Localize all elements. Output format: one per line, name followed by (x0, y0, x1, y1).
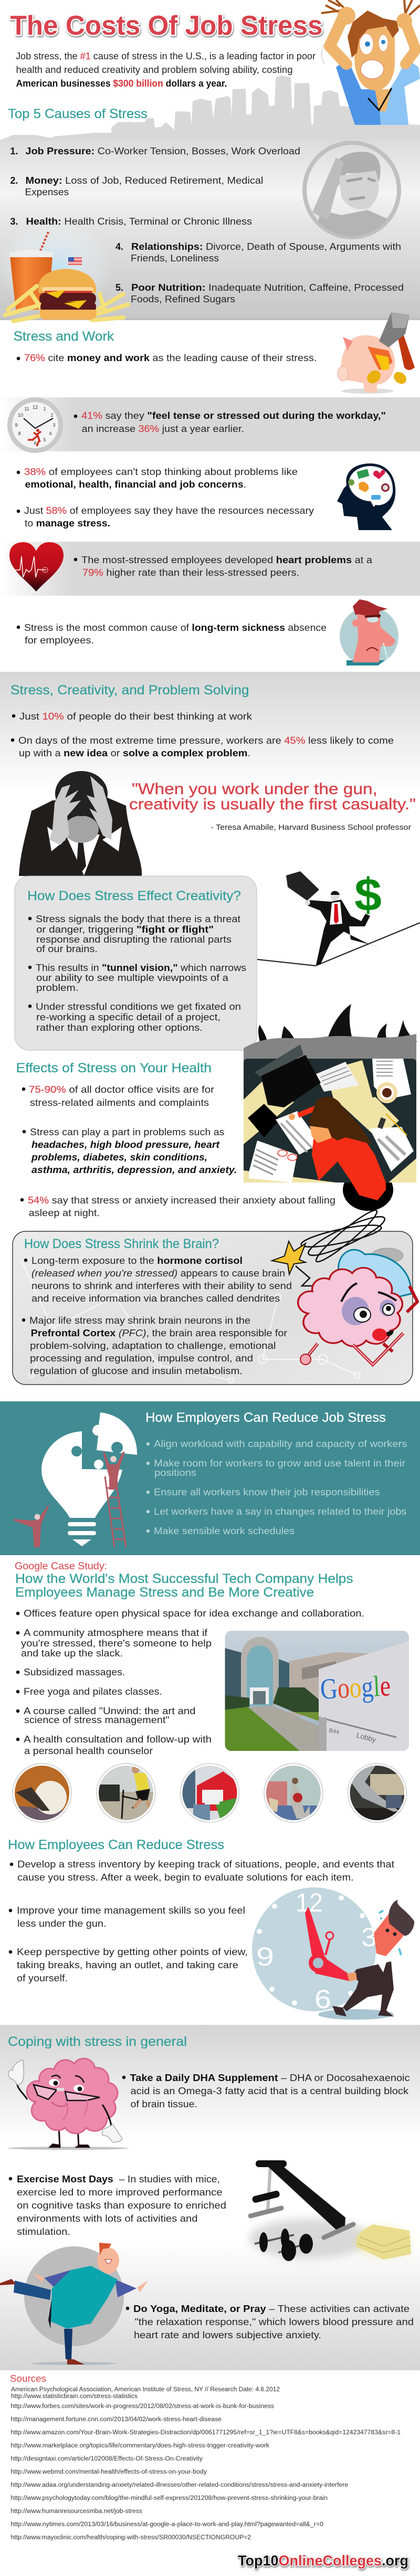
photo ovals row (13, 1764, 406, 1822)
bullet: DHA supplement: of brain tissue. (130, 2099, 197, 2109)
list: google benefits: and take up the slack. (21, 1648, 123, 1659)
panel: how does stress shrink the brain: neurons to shrink and interferes with their ability to send (32, 1281, 292, 1291)
heading: effect creativity: How Does Stress Effect Creativity? (27, 889, 241, 903)
heading: google case study (15, 1561, 353, 1600)
list: employer actions: Make room for workers to grow and use talent in their (154, 1458, 405, 1469)
heading: shrink the brain: How Does Stress Shrink the Brain? (24, 1237, 219, 1251)
icon: wall clock with running man: 3 (52, 423, 56, 428)
list: causes of stress: Foods, Refined Sugars (131, 294, 235, 304)
icon: businessman on tightrope (257, 869, 420, 966)
icon: fast food burger and drink (0, 220, 128, 321)
icon: big clock with running late man: 3 (361, 1923, 377, 1952)
bullets: effects on health: asleep at night. (29, 1208, 100, 1218)
bullets: 38 and 58 percent: emotional, health, financial and job concerns . (25, 479, 246, 490)
icon: big clock with running late man: 9 (256, 1942, 274, 1971)
panel: how does stress shrink the brain: and receive information via branches called dendrites (32, 1293, 280, 1304)
bullet: 41 percent: 41% say they "feel tense or stressed out during the workday," (81, 410, 386, 421)
panel: how does stress effect creativity: our ability to see multiple viewpoints of a (36, 973, 229, 983)
icon: exercise bench and dumbbells (249, 2160, 412, 2261)
panel: how does stress shrink the brain: Major life stress may shrink brain neurons in the (29, 1315, 250, 1326)
list: causes of stress: Relationships: Divorce, Death of Spouse, Arguments with (131, 241, 401, 252)
quote: creativity is usually the first casualty." (129, 796, 416, 813)
icon: lightbulb puzzle with workers (14, 1412, 137, 1547)
bullets: effects on health (20, 1084, 335, 1218)
intro text block: Job stress, the #1 cause of stress in the U.S., is a leading factor in poor (16, 51, 316, 61)
bullets: effects on health: asthma, arthritis, depression, and anxiety. (32, 1165, 237, 1175)
icon: head silhouette with worries (337, 463, 395, 530)
icon: wall clock with running man: 11 (24, 406, 29, 411)
quote attribution: - Teresa Amabile, Harvard Business School professor (211, 823, 411, 832)
photo: hanging chairs (264, 1764, 323, 1822)
sources list (10, 2387, 401, 2541)
bullet: exercise: exercise led to more improved performance (17, 2187, 223, 2198)
sources list: http://www.nytimes.com/2013/03/16/business/at-google-a-place-to-work-and-play.html?pagewanted=all&_r=0 (10, 2521, 323, 2528)
intro text block (16, 51, 316, 89)
bullet: yoga: heart rate and lowers subjective anxiety. (134, 2330, 321, 2340)
icon: wall clock with running man: 4 (49, 431, 52, 436)
panel: how does stress effect creativity: This results in "tunnel vision," which narrows (36, 963, 246, 973)
heading: employers reduce stress: How Employers Can Reduce Job Stress (145, 1410, 386, 1425)
bullet: yoga (126, 2304, 414, 2340)
bullets: effects on health: Stress can play a part in problems such as (30, 1127, 225, 1137)
panel: how does stress effect creativity: rather than exploring other options. (36, 1022, 203, 1033)
panel: how does stress effect creativity: of our brains. (36, 944, 98, 954)
list: causes of stress: 1. (10, 146, 18, 156)
list: google benefits (16, 1608, 364, 1756)
list: employee actions: Develop a stress inventory by keeping track of situations, people, and events that (17, 1859, 394, 1870)
heading: sources: Sources (10, 2373, 46, 2384)
icon: wall clock with running man: 8 (18, 431, 21, 436)
list: google benefits: science of stress management" (24, 1715, 169, 1725)
photo: google headquarters lobby sign (225, 1631, 410, 1751)
photo: google headquarters lobby sign: Lobby (355, 1730, 377, 1744)
icon: piggy bank and hammer (338, 312, 415, 394)
panel: how does stress effect creativity: Under stressful conditions we get fixated on (36, 1001, 241, 1012)
heading: google case study: Google Case Study: (15, 1561, 107, 1572)
panel: how does stress effect creativity: Stress signals the body that there is a threat (36, 914, 240, 924)
list: employee actions: Improve your time management skills so you feel (17, 1905, 245, 1916)
intro text block: health and reduced creativity and problem solving ability, costing (16, 65, 293, 75)
list: employer actions: Align workload with capability and capacity of workers (154, 1439, 407, 1449)
bullet: exercise (9, 2174, 226, 2237)
list: causes of stress: Health: Health Crisis, Terminal or Chronic Illness (26, 216, 252, 227)
photo: slide (348, 1764, 406, 1822)
icon: wall clock with running man: 2 (50, 413, 54, 418)
bullets: 10 and 45 percent: up with a new idea or solve a complex problem . (19, 748, 250, 758)
bullets: 10 and 45 percent: On days of the most extreme time pressure, workers are 45% less likely to come (18, 735, 394, 746)
bullets: 38 and 58 percent: 38% of employees can't stop thinking about problems like (24, 467, 298, 477)
heading: top 5 causes: Top 5 Causes of Stress (8, 107, 148, 121)
icon: sick brain with ice pack (272, 1206, 417, 1365)
bullet: heart problems: 79% higher rate than their less-stressed peers. (82, 567, 299, 578)
footer logo: Top10OnlineColleges.org (238, 2552, 408, 2569)
list: causes of stress (10, 146, 404, 304)
heading: stress and work: Stress and Work (14, 329, 114, 344)
bullet: heart problems: The most-stressed employees developed heart problems at a (81, 555, 373, 565)
panel: heart band (0, 542, 420, 596)
icon: wall clock with running man: 1 (43, 406, 46, 411)
sources list: http://designtaxi.com/article/102008/Effects-Of-Stress-On-Creativity (10, 2456, 203, 2462)
panel: creativity background (0, 672, 420, 793)
sources list: http://www.humanresourcesmba.net/job-stress (10, 2508, 142, 2515)
list: employee actions: less under the gun. (17, 1918, 106, 1929)
photo: red office (181, 1764, 239, 1822)
icon: wall clock with running man: 6 (34, 440, 37, 446)
bullet: yoga: Do Yoga, Meditate, or Pray – These activities can activate (133, 2304, 410, 2314)
list: causes of stress: 3. (10, 216, 18, 227)
bullet: DHA supplement: Take a Daily DHA Supplement – DHA or Docosahexaenoic (130, 2073, 410, 2083)
title: The Costs Of Job Stress (10, 10, 322, 41)
quote (129, 780, 416, 813)
photo: sleep pod (13, 1764, 71, 1822)
bullets: 10 and 45 percent (11, 711, 394, 758)
list: employer actions: Make sensible work schedules (154, 1526, 295, 1536)
sources list: http://www.mayoclinic.com/health/coping-with-stress/SR00030/NSECTIONGROUP=2 (10, 2535, 251, 2541)
bullet: heart problems (74, 555, 373, 578)
heading: google case study: How the World's Most Successful Tech Company Helps (15, 1571, 353, 1586)
list: google benefits: A course called "Unwind: the art and (24, 1706, 195, 1716)
panel: how does stress shrink the brain: problem-solving, adaptation to challenge, emotional (30, 1340, 276, 1351)
bullet: sickness absence (17, 622, 327, 646)
icon: big clock with running late man: 12 (296, 1888, 323, 1917)
quote: "When you work under the gun, (132, 780, 377, 798)
bullets: 38 and 58 percent: to manage stress. (25, 518, 110, 529)
panel: how does stress effect creativity (15, 876, 257, 1050)
bullet: 41 percent: an increase 36% just a year earlier. (82, 424, 244, 434)
bullet: DHA supplement: acid is an Omega-3 fatty acid that is a central building block (130, 2086, 409, 2096)
icon: man holding head (19, 771, 142, 876)
list: employer actions (146, 1439, 407, 1536)
list: google benefits: a personal health counselor (24, 1746, 153, 1756)
bullet: 76 percent: 76% cite money and work as the leading cause of their stress. (24, 353, 317, 363)
list: employee actions: of yourself. (17, 1973, 68, 1983)
list: employer actions: positions (154, 1468, 196, 1478)
bullets: effects on health: problems, diabetes, skin conditions, (31, 1152, 207, 1163)
intro text block: American businesses $300 billion dollars a year. (16, 78, 227, 89)
icon: businessman on tightrope: $ (354, 869, 382, 921)
panel: workday band (0, 397, 420, 451)
list: employee actions: taking breaks, having an outlet, and taking care (17, 1960, 238, 1970)
bullets: effects on health: headaches, high blood pressure, heart (32, 1139, 220, 1150)
list: google benefits: A community atmosphere means that if (24, 1628, 208, 1638)
list: employee actions: cause you stress. After a week, begin to evaluate solutions for each item. (17, 1872, 354, 1883)
sources list: http://www.forbes.com/sites/work-in-progress/2012/08/02/stress-at-work-is-bunk-for-business (10, 2403, 274, 2410)
heading: coping with stress: Coping with stress in general (8, 2034, 187, 2049)
bullets: effects on health: 75-90% of all doctor office visits are for (29, 1084, 214, 1095)
city skyline (0, 76, 420, 147)
bullets: 38 and 58 percent: Just 58% of employees say they have the resources necessary (24, 505, 314, 516)
sources list: http://www.adaa.org/understanding-anxiety/related-illnesses/other-related-conditions/stress/stress-and-anxiety-interfere (10, 2482, 348, 2488)
panel: how does stress effect creativity: or danger, triggering "fight or flight" (36, 924, 214, 935)
icon: big clock with running late man (252, 1887, 414, 2020)
heading: stress creativity: Stress, Creativity, and Problem Solving (10, 683, 249, 698)
list: causes of stress: Money: Loss of Job, Reduced Retirement, Medical (25, 175, 264, 186)
panel: how does stress effect creativity: problem. (36, 983, 79, 993)
icon: stressed man pulling hair (321, 0, 420, 125)
bullet: sickness absence: Stress is the most common cause of long-term sickness absence (24, 622, 327, 633)
list: employee actions: Keep perspective by getting other points of view, (17, 1947, 248, 1957)
sources list: http://www.psychologytoday.com/blog/the-mindful-self-express/201208/how-prevent-stress-shrinking-your-brain (10, 2495, 328, 2501)
list: employee actions (9, 1859, 394, 1983)
bullets: effects on health: 54% say that stress or anxiety increased their anxiety about falling (28, 1195, 335, 1206)
icon: man doing yoga (0, 2243, 148, 2365)
list: google benefits: Free yoga and pilates classes. (24, 1686, 162, 1697)
panel: causes background (0, 140, 420, 320)
sources list: American Psychological Association, American Institute of Stress, NY // Research Date: 4.6.2012 (11, 2387, 280, 2393)
bullets: 38 and 58 percent (17, 467, 314, 529)
bullet: exercise: environments with lots of activities and (17, 2213, 198, 2224)
photo: google headquarters lobby sign: B44 (328, 1727, 340, 1736)
panel: how does stress shrink the brain: regulation of glucose and insulin metabolism. (30, 1366, 243, 1376)
list: causes of stress: 4. (116, 241, 123, 252)
icon: wall clock with running man (7, 397, 63, 453)
icon: heart with ECG (9, 542, 64, 592)
icon: brain with glasses (8, 2058, 129, 2150)
list: causes of stress: Poor Nutrition: Inadequate Nutrition, Caffeine, Processed (131, 282, 404, 293)
panel: how does stress shrink the brain (13, 1231, 413, 1385)
list: causes of stress: Expenses (25, 187, 69, 197)
icon: wall clock with running man: 12 (33, 405, 38, 410)
heading: effects on health: Effects of Stress on Your Health (16, 1061, 212, 1075)
sources list: http://www.webmd.com/mental-health/effects-of-stress-on-your-body (10, 2469, 207, 2475)
bullet: exercise: stimulation. (17, 2226, 70, 2237)
bullet: 41 percent (74, 410, 386, 434)
icon: wall clock with running man: 9 (15, 423, 18, 428)
list: google benefits: Subsidized massages. (24, 1667, 125, 1677)
band: causes bottom edge (0, 318, 420, 320)
list: causes of stress: Job Pressure: Co-Worker Tension, Bosses, Work Overload (25, 146, 300, 156)
list: causes of stress: 2. (10, 175, 18, 186)
bullets: effects on health: stress-related ailments and complaints (30, 1097, 209, 1108)
bullets: 10 and 45 percent: Just 10% of people do their best thinking at work (19, 711, 253, 722)
icon: sick man (340, 599, 398, 666)
panel: how does stress shrink the brain: Long-term exposure to the hormone cortisol (32, 1255, 243, 1266)
icon: big clock with running late man: 6 (314, 1984, 331, 2014)
list: causes of stress: Friends, Loneliness (131, 253, 219, 263)
panel: how does stress effect creativity: re-working a specific detail of a project, (36, 1012, 220, 1022)
bullet: yoga: "the relaxation response," which lowers blood pressure and (135, 2317, 414, 2327)
icon: wall clock with running man: 10 (18, 413, 23, 418)
bullet: exercise: Exercise Most Days – In studies with mice, (17, 2174, 220, 2184)
sources list: http://management.fortune.cnn.com/2013/04/02/work-stress-heart-disease (10, 2416, 222, 2423)
photo: gym bike (97, 1764, 155, 1822)
illustration: stressed woman at desk (244, 1004, 417, 1211)
panel: how does stress effect creativity: response and disrupting the rational parts (36, 934, 232, 945)
panel: how does stress shrink the brain: (released when you're stressed) appears to cause brain (32, 1268, 285, 1279)
heading: employees reduce stress: How Employees Can Reduce Stress (8, 1838, 224, 1852)
panel: coping background (0, 2025, 420, 2370)
list: google benefits: Offices feature open physical space for idea exchange and collaboration. (24, 1608, 364, 1619)
panel: how does stress shrink the brain: Prefrontal Cortex (PFC) , the brain area responsible for (31, 1328, 287, 1338)
photo: google headquarters lobby sign: Google (319, 1670, 391, 1706)
panel: how does stress shrink the brain: processing and regulation, impulse control, and (30, 1353, 253, 1364)
bullet: exercise: on cognitive tasks than exposure to enriched (17, 2200, 226, 2211)
list: google benefits: you're stressed, there's someone to help (21, 1638, 212, 1649)
bullet: DHA supplement (122, 2073, 410, 2109)
panel: employers background (0, 1401, 420, 1555)
icon: stressed man seal (304, 143, 399, 241)
bullet: sickness absence: for employees. (25, 635, 94, 646)
list: employer actions: Let workers have a say in changes related to their jobs (154, 1506, 406, 1517)
list: employer actions: Ensure all workers know their job responsibilities (154, 1487, 380, 1497)
sources list: http://www.amazon.com/Your-Brain-Work-Strategies-Distraction/dp/0061771295/ref=sr_1_1?ie=UTF8&s=books&qid=1242347783&sr=8-1 (10, 2430, 401, 2436)
sources list: http://www.statisticbrain.com/stress-statistics (11, 2393, 138, 2400)
icon: wall clock with running man: 5 (43, 437, 46, 442)
list: causes of stress: 5. (116, 282, 123, 293)
list: google benefits: A health consultation and follow-up with (24, 1734, 212, 1745)
heading: google case study: Employees Manage Stress and Be More Creative (15, 1585, 314, 1600)
sources list: http://www.marketplace.org/topics/life/commentary/does-high-stress-trigger-creativity-work (10, 2443, 269, 2449)
